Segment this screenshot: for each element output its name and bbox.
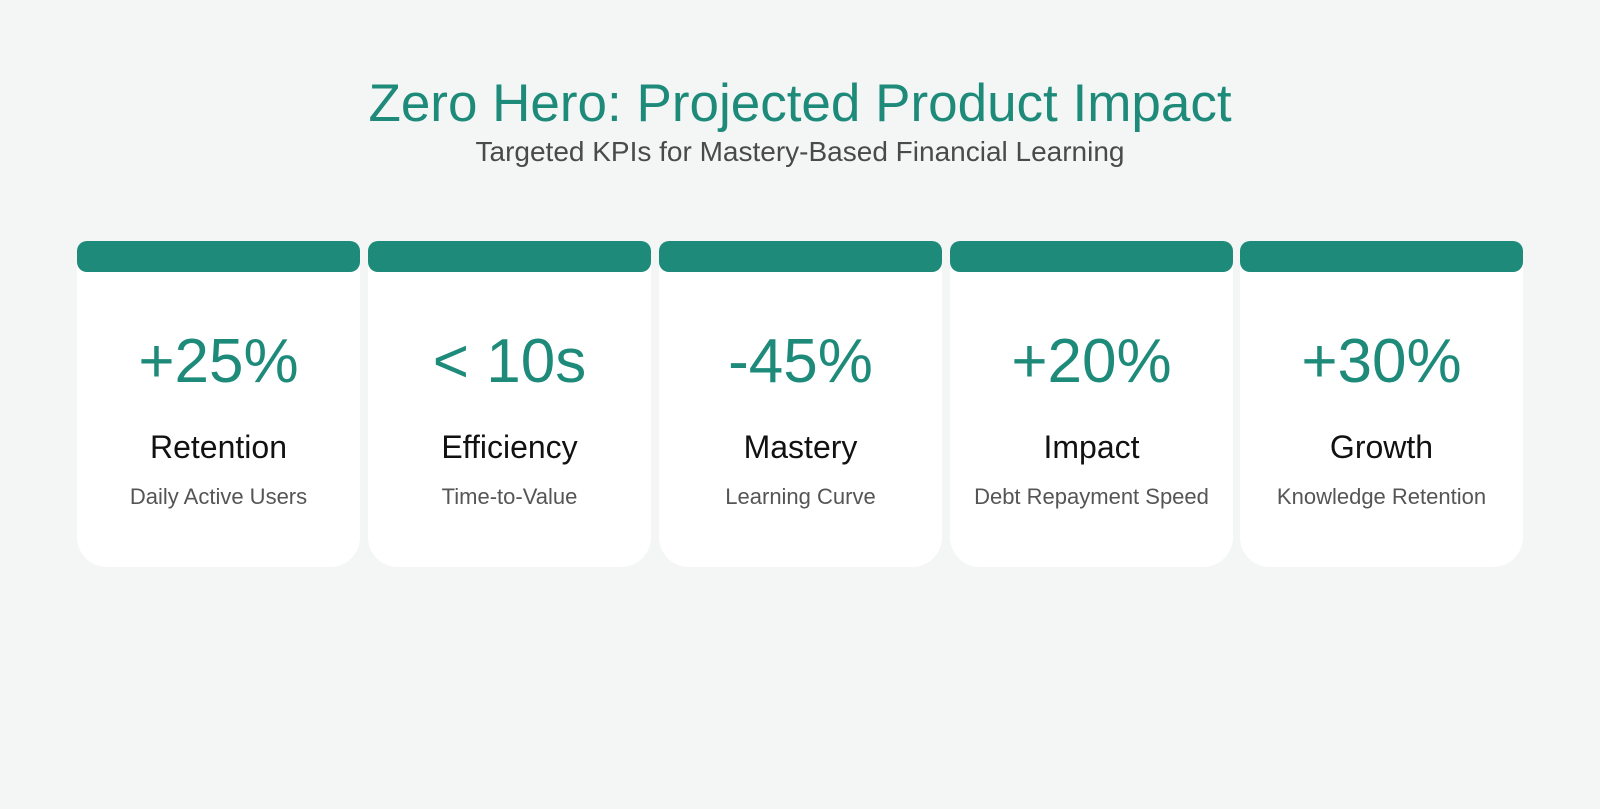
card: efficiency: Time-to-Value: [442, 484, 577, 509]
card: growth: [1240, 241, 1523, 567]
card: mastery: -45%: [728, 327, 873, 396]
card: growth: Growth: [1330, 429, 1433, 465]
card: impact: Impact: [1043, 429, 1140, 465]
subtitle: Targeted KPIs for Mastery-Based Financial Learning: [476, 136, 1124, 167]
card: mastery: Learning Curve: [725, 484, 876, 509]
card: growth: Knowledge Retention: [1277, 484, 1486, 509]
card: mastery: Mastery: [744, 429, 857, 465]
card: retention: [77, 241, 360, 567]
card: retention: Daily Active Users: [130, 484, 307, 509]
card: retention: +25%: [138, 327, 299, 396]
card: mastery: [659, 241, 942, 567]
card: impact: Debt Repayment Speed: [974, 484, 1209, 509]
card: retention: Retention: [150, 429, 287, 465]
card: impact: +20%: [1011, 327, 1172, 396]
title: Zero Hero: Projected Product Impact: [368, 74, 1232, 133]
card: growth: +30%: [1301, 327, 1462, 396]
card: impact: [950, 241, 1233, 567]
card: efficiency: Efficiency: [441, 429, 578, 465]
card: efficiency: < 10s: [433, 327, 586, 396]
card: efficiency: [368, 241, 651, 567]
